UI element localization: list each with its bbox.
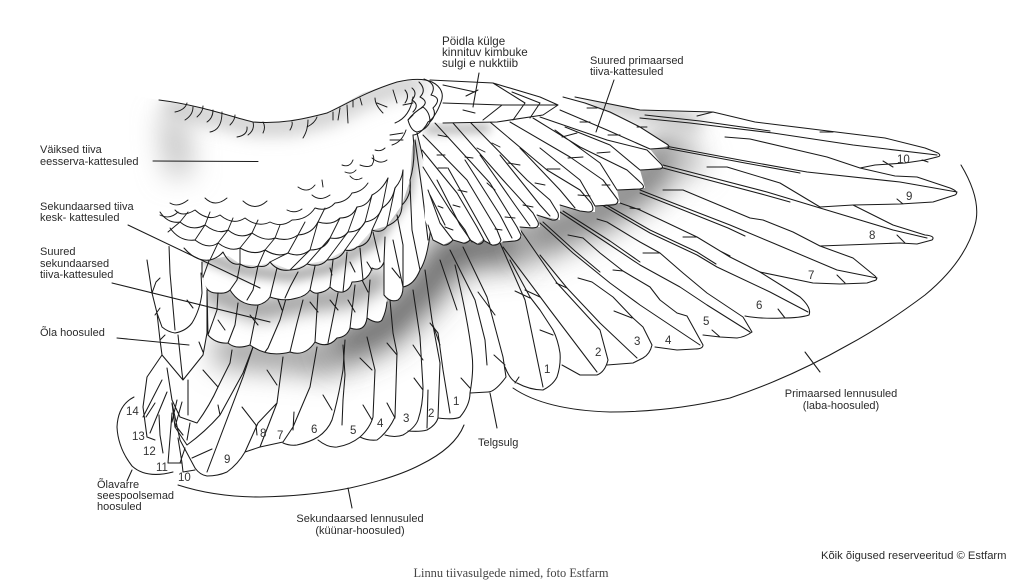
numbers on feathers: 7 bbox=[808, 270, 814, 282]
secondary 4 bbox=[360, 300, 397, 440]
numbers on feathers: 8 bbox=[260, 428, 266, 440]
label: greater primary coverts: Suured primaarsed bbox=[590, 55, 684, 67]
scapular feathers bbox=[147, 245, 207, 380]
label: lesser coverts: Väiksed tiiva bbox=[40, 144, 102, 156]
feather stack behind bbox=[167, 347, 253, 445]
label: primaries: (laba-hoosuled) bbox=[803, 400, 879, 412]
lesser and median coverts bbox=[148, 78, 443, 271]
small wrist scales bbox=[405, 79, 438, 132]
numbers on feathers: 4 bbox=[665, 335, 672, 347]
numbers on feathers: 6 bbox=[756, 300, 762, 312]
numbers on feathers: 12 bbox=[143, 446, 156, 458]
primary coverts bbox=[420, 90, 670, 250]
feather 10 bbox=[575, 97, 940, 168]
label: lesser coverts: eesserva-kattesuled bbox=[40, 156, 138, 168]
numbers on feathers: 4 bbox=[377, 418, 384, 430]
inner bracket bbox=[117, 397, 173, 481]
numbers on feathers: 2 bbox=[595, 347, 601, 359]
numbers on feathers bbox=[126, 154, 912, 484]
label: alula: Pöidla külge bbox=[442, 35, 505, 48]
label: greater secondary coverts: tiiva-kattesuled bbox=[40, 269, 113, 281]
secondary 3 bbox=[385, 290, 423, 436]
label: primaries: Primaarsed lennusuled bbox=[785, 388, 897, 400]
feather 5 bbox=[560, 211, 752, 338]
median scale rows bbox=[184, 135, 414, 270]
secondary 8 bbox=[242, 357, 283, 452]
numbers on feathers: 1 bbox=[453, 396, 459, 408]
numbers on feathers: 2 bbox=[428, 408, 434, 420]
greater secondary coverts upper row bbox=[190, 130, 435, 310]
numbers on feathers: 1 bbox=[544, 364, 550, 376]
leader lines bbox=[112, 73, 614, 345]
greater secondary coverts lower row bbox=[207, 265, 388, 354]
feather 7 bbox=[640, 190, 877, 284]
axial leader bbox=[490, 393, 497, 428]
label: scapulars: Õla hoosuled bbox=[40, 326, 105, 339]
numbers on feathers: 10 bbox=[897, 154, 910, 166]
numbers on feathers: 3 bbox=[403, 413, 409, 425]
caption: Linnu tiivasulgede nimed, foto Estfarm bbox=[413, 566, 609, 580]
label: axial feather: Telgsulg bbox=[478, 437, 518, 449]
flight feather shading bbox=[200, 99, 716, 393]
secondary 5 bbox=[318, 337, 375, 447]
label: alula: kinnituv kimbuke bbox=[442, 46, 528, 59]
wing illustration bbox=[100, 78, 970, 490]
label: humeral feathers: seespoolsemad bbox=[97, 490, 174, 502]
label: secondaries: (küünar-hoosuled) bbox=[315, 525, 405, 537]
feather 3 bbox=[540, 255, 652, 365]
secondary 7 bbox=[260, 347, 317, 447]
feather 9 bbox=[660, 145, 957, 207]
inner feathers 10-14 bbox=[143, 355, 195, 472]
numbers on feathers: 3 bbox=[634, 336, 640, 348]
secondary 1 bbox=[430, 260, 473, 419]
secondary bracket bbox=[178, 425, 464, 508]
primary bracket bbox=[513, 165, 977, 412]
numbers on feathers: 11 bbox=[156, 462, 168, 474]
label: greater primary coverts: tiiva-kattesuled bbox=[590, 66, 663, 78]
label: greater secondary coverts: Suured bbox=[40, 246, 75, 258]
feather 8 bbox=[663, 165, 933, 246]
numbers on feathers: 9 bbox=[224, 454, 230, 466]
feather 1 bbox=[500, 243, 560, 390]
primary flight feathers bbox=[500, 97, 957, 390]
feather 6 bbox=[602, 203, 810, 318]
label: humeral feathers: Õlavarre bbox=[97, 479, 139, 491]
top edge bbox=[159, 79, 442, 135]
numbers on feathers: 10 bbox=[178, 472, 191, 484]
label: greater secondary coverts: sekundaarsed bbox=[40, 258, 109, 270]
brackets and leader lines bbox=[112, 73, 977, 508]
secondary 6 bbox=[283, 340, 345, 445]
tertial feathers bbox=[143, 347, 253, 472]
label: secondaries: Sekundaarsed lennusuled bbox=[296, 513, 424, 525]
label: median secondary coverts: Sekundaarsed tiiva bbox=[40, 201, 134, 213]
axial feather and secondaries bbox=[192, 247, 506, 476]
numbers on feathers: 5 bbox=[703, 316, 709, 328]
top edge hooks bbox=[175, 90, 413, 145]
numbers on feathers: 9 bbox=[906, 191, 912, 203]
numbers on feathers: 13 bbox=[132, 431, 145, 443]
feather 4 bbox=[540, 222, 703, 350]
feather 2 bbox=[503, 215, 608, 375]
numbers on feathers: 8 bbox=[869, 230, 875, 242]
axial feather bbox=[450, 247, 506, 393]
copyright: Kõik õigused reserveeritud © Estfarm bbox=[821, 550, 1006, 562]
secondary 2 bbox=[408, 270, 440, 431]
numbers on feathers: 14 bbox=[126, 406, 139, 418]
alula bbox=[425, 80, 558, 123]
numbers on feathers: 5 bbox=[350, 425, 356, 437]
secondary 9 bbox=[192, 347, 277, 476]
numbers on feathers: 6 bbox=[311, 424, 317, 436]
numbers on feathers: 7 bbox=[277, 430, 283, 442]
label: humeral feathers: hoosuled bbox=[97, 501, 142, 513]
label: alula: sulgi e nukktiib bbox=[442, 57, 518, 70]
label: median secondary coverts: kesk- kattesuled bbox=[40, 212, 119, 224]
